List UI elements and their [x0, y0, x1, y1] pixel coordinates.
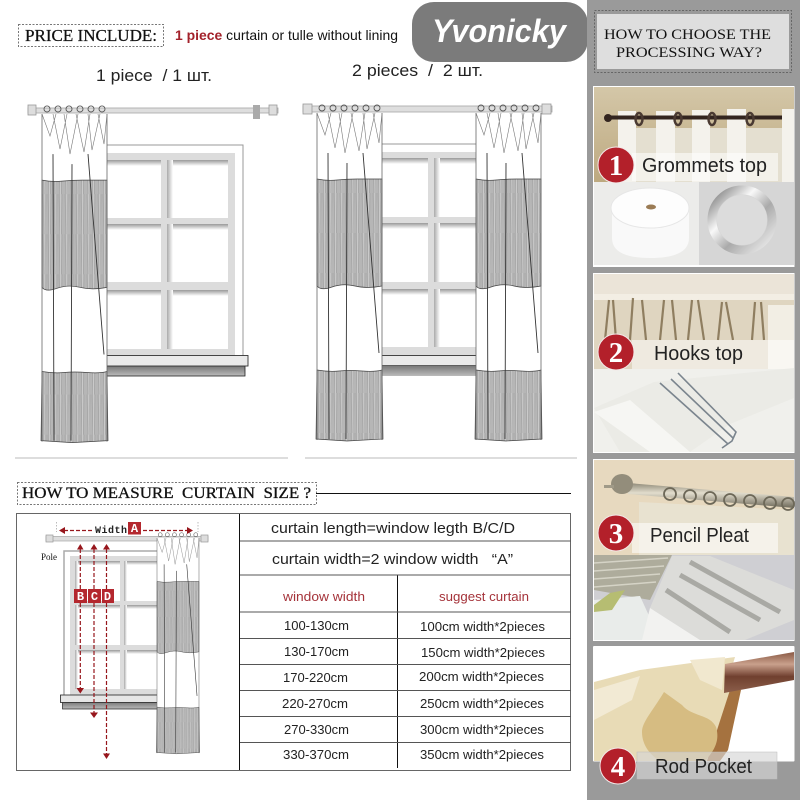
badge: number 3 [598, 515, 634, 551]
illustration: single curtain on window [28, 105, 278, 443]
heading: how to measure curtain size: HOW TO MEASURE CURTAIN SIZE ? [22, 485, 311, 502]
heading: how to measure curtain size [18, 482, 571, 504]
table rows [282, 618, 545, 762]
photo: metal hook on tape [594, 368, 794, 452]
illustration: two curtains on window [303, 104, 552, 441]
formula: curtain length: curtain length=window legth B/C/D [271, 520, 515, 537]
photo: grommet curtain [594, 87, 794, 182]
photo: metal grommet ring [699, 182, 794, 265]
divider right [305, 457, 577, 459]
arrow: width A: Width [95, 525, 127, 537]
table rows: 100cm width*2pieces [420, 619, 545, 634]
badge: number 2 [598, 334, 634, 370]
panel: 3 pencil pleat [593, 459, 794, 641]
label band: grommets top [632, 153, 778, 181]
photo: rod pocket fabric [594, 652, 794, 761]
arrow: length D [102, 544, 114, 759]
badge: number 1: 1 [609, 150, 623, 182]
arrow: length B: B [77, 590, 84, 604]
label band: grommets top: Grommets top [642, 155, 767, 177]
caption: 1 piece: 1 piece / 1 шт. [96, 66, 212, 85]
photo: pencil pleat tape [594, 555, 794, 640]
column header: suggest curtain: suggest curtain [439, 589, 529, 604]
arrow: length C: C [91, 590, 98, 604]
label band: rod pocket: Rod Pocket [655, 756, 752, 778]
badge: number 3: 3 [609, 518, 623, 550]
label band: pencil pleat [632, 523, 778, 553]
diagram: measuring window [46, 533, 208, 754]
arrow: width A [56, 522, 198, 537]
table rows: 150cm width*2pieces [421, 645, 545, 660]
photo: white tape roll [594, 182, 699, 265]
caption: 2 pieces: 2 pieces / 2 шт. [352, 61, 483, 80]
arrow: length C [88, 544, 101, 718]
panel: measure box [16, 514, 570, 770]
table rows: 350cm width*2pieces [420, 747, 544, 762]
arrow: length B [74, 544, 87, 694]
table rows: 300cm width*2pieces [420, 722, 544, 737]
label band: rod pocket [637, 752, 777, 779]
logo: Yvonicky [412, 2, 588, 62]
badge: number 2: 2 [609, 337, 623, 369]
heading: price include: PRICE INCLUDE: [25, 26, 157, 45]
table rows: 100-130cm [284, 618, 349, 633]
panel: 4 rod pocket [593, 646, 794, 784]
table rows: 220-270cm [282, 696, 348, 711]
panel: right column background [587, 0, 800, 800]
panel: 1 grommets top [593, 86, 794, 267]
divider left [15, 457, 288, 459]
badge: number 4 [600, 748, 636, 784]
table rows: 330-370cm [283, 747, 349, 762]
label band: pencil pleat: Pencil Pleat [650, 525, 749, 547]
arrow: length D: D [104, 590, 111, 604]
badge: number 1 [598, 147, 634, 183]
heading: how to choose the processing way [594, 10, 792, 72]
column header: window width: window width [282, 589, 365, 604]
table rows: 250cm width*2pieces [420, 696, 544, 711]
label: pole: Pole [41, 553, 57, 563]
heading: how to choose the processing way: HOW TO CHOOSE THE [604, 27, 771, 43]
formula: curtain width: curtain width=2 window width “A” [272, 551, 513, 568]
table rows: 270-330cm [284, 722, 349, 737]
photo: metal rod with pencil pleat curtain [594, 460, 794, 556]
heading: how to choose the processing way: PROCESSING WAY? [616, 45, 762, 61]
logo: Yvonicky: Yvonicky [432, 13, 568, 49]
text: price description: 1 piece curtain or tulle without lining [175, 27, 398, 43]
table rows: 200cm width*2pieces [419, 669, 544, 684]
photo: pinch pleat curtain [594, 274, 794, 370]
badge: number 4: 4 [611, 751, 625, 783]
table rows: 170-220cm [283, 670, 348, 685]
label band: hooks top [632, 340, 794, 369]
table rows: 130-170cm [284, 644, 349, 659]
arrow: width A: A [131, 522, 139, 536]
label band: hooks top: Hooks top [654, 343, 743, 365]
size table [239, 514, 571, 770]
panel: 2 hooks top [593, 273, 794, 453]
